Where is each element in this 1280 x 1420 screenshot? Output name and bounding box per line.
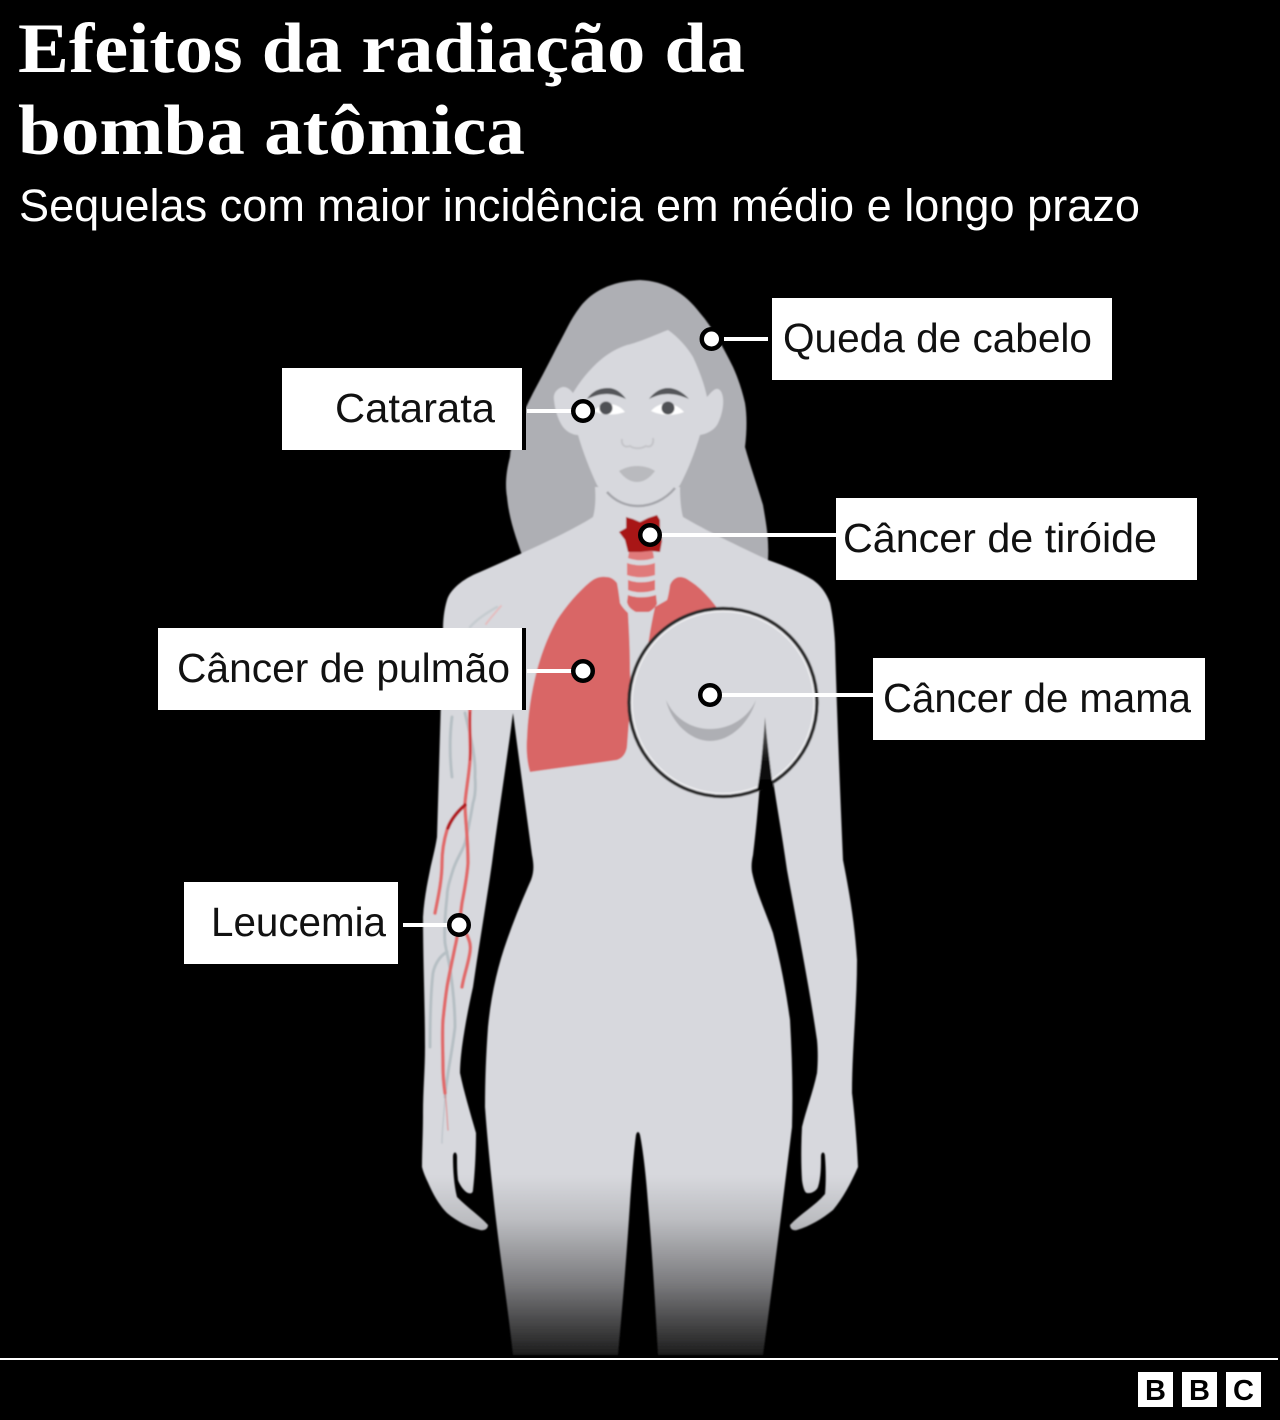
hair bbox=[506, 280, 768, 560]
eyes bbox=[594, 402, 684, 415]
chin line bbox=[607, 488, 675, 506]
label: câncer de pulmão bbox=[158, 628, 575, 710]
connector bbox=[527, 409, 575, 413]
title: bomba atômica bbox=[18, 92, 525, 170]
face bbox=[554, 330, 723, 510]
label: leucemia: Leucemia bbox=[211, 899, 386, 945]
title bbox=[18, 10, 745, 170]
label: catarata: Catarata bbox=[335, 385, 495, 431]
label: câncer de mama bbox=[720, 658, 1205, 740]
label: queda de cabelo: Queda de cabelo bbox=[783, 315, 1092, 361]
marker: pulmão bbox=[573, 661, 593, 681]
veins red bbox=[435, 710, 470, 1130]
label: queda de cabelo bbox=[724, 298, 1112, 380]
label: câncer de tiróide bbox=[660, 498, 1197, 580]
marker: queda de cabelo bbox=[702, 329, 721, 349]
breast lens circle bbox=[629, 608, 817, 796]
connector bbox=[403, 923, 449, 927]
body bbox=[422, 487, 858, 1355]
label: catarata bbox=[282, 368, 575, 450]
marker: catarata bbox=[573, 401, 593, 421]
marker: leucemia bbox=[449, 915, 469, 935]
trachea bbox=[627, 549, 657, 612]
connector bbox=[527, 669, 575, 673]
title: Efeitos da radiação da bbox=[18, 10, 745, 88]
label: leucemia bbox=[184, 882, 449, 964]
label: câncer de mama: Câncer de mama bbox=[883, 675, 1191, 721]
BBC logo: B bbox=[1145, 1375, 1166, 1407]
marker: mama bbox=[700, 685, 720, 705]
veins grey bbox=[430, 606, 501, 1143]
label: câncer de tiróide: Câncer de tiróide bbox=[843, 515, 1157, 561]
lungs bbox=[527, 577, 720, 772]
BBC logo: C bbox=[1233, 1375, 1254, 1407]
nose bbox=[622, 438, 653, 448]
connector bbox=[724, 337, 768, 341]
connector bbox=[660, 533, 836, 537]
BBC logo bbox=[1138, 1372, 1261, 1407]
eyebrows bbox=[587, 388, 689, 399]
armpit shadow bbox=[757, 717, 773, 791]
mouth bbox=[619, 466, 655, 482]
breast crescent bbox=[666, 700, 756, 741]
subtitle: Sequelas com maior incidência em médio e longo prazo bbox=[19, 180, 1140, 231]
label: câncer de pulmão: Câncer de pulmão bbox=[177, 645, 510, 691]
BBC logo: B bbox=[1189, 1375, 1210, 1407]
marker: tiróide bbox=[640, 525, 660, 545]
connector bbox=[720, 693, 873, 697]
thyroid bbox=[619, 515, 662, 552]
human figure bbox=[422, 280, 858, 1355]
footer rule bbox=[0, 1358, 1278, 1360]
